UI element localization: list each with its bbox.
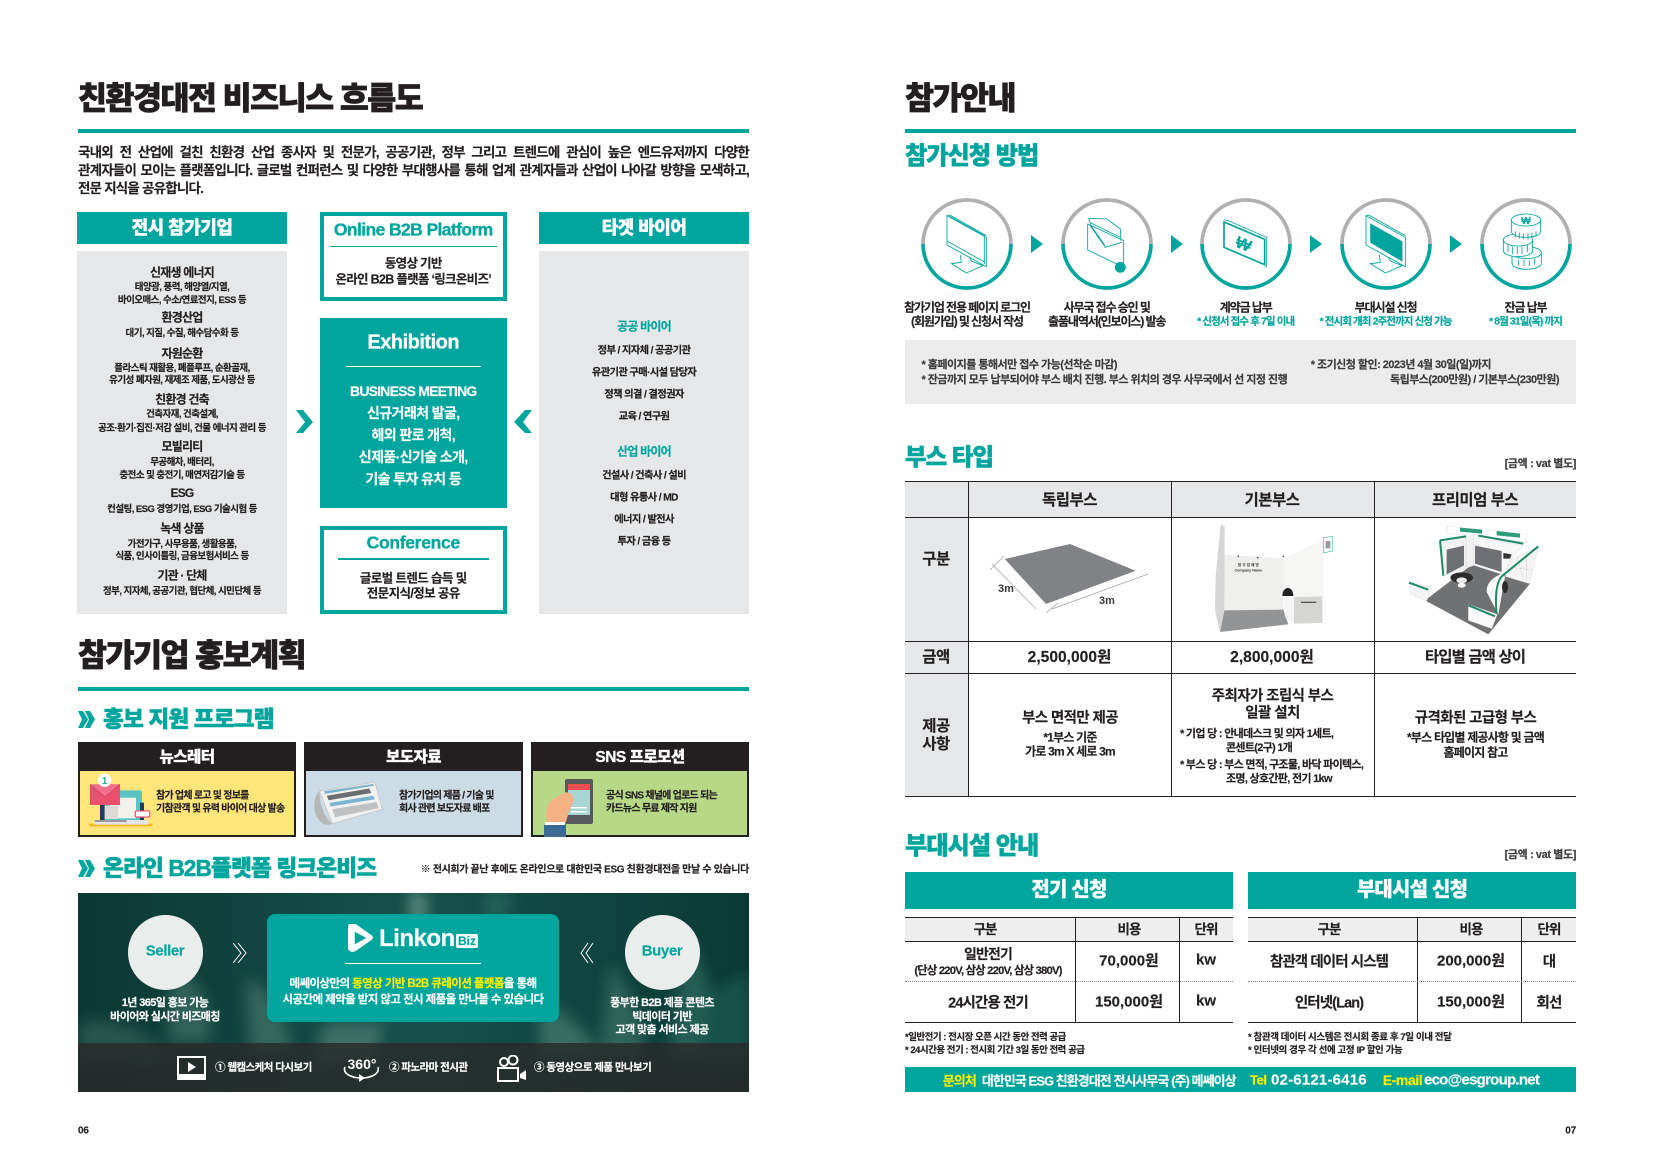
arrow: step 4 to 5 <box>1450 235 1462 253</box>
col 1 details <box>969 706 1171 761</box>
image: basic shell booth <box>1175 517 1371 641</box>
panel: conference: 전문지식/정보 공유 <box>367 586 460 600</box>
seller text <box>110 996 220 1023</box>
step 1 label: 참가기업 전용 페이지 로그인 <box>904 300 1030 314</box>
panel: application notes: 독립부스(200만원) / 기본부스(230만원) <box>1390 374 1559 386</box>
header: target buyers <box>539 212 749 244</box>
panel: exhibitors list: 기관 · 단체 <box>157 568 207 582</box>
panel: exhibition <box>320 318 506 508</box>
icon: video camera <box>497 1055 526 1082</box>
panel: exhibitors list: 바이오매스, 수소/연료전지, ESS 등 <box>118 295 246 306</box>
panel: Linkon Biz banner <box>78 893 749 1092</box>
panel: exhibitors list: 건축자재, 건축설계, <box>146 409 218 420</box>
panel: exhibitors list: 무공해차, 배터리, <box>150 457 214 468</box>
panel: electric application: 일반전기 <box>964 946 1012 962</box>
arrow: double chevron left <box>580 943 594 963</box>
table: booth types: 제공 <box>922 718 950 734</box>
step 5 label <box>1489 300 1562 328</box>
col 1 details: 부스 면적만 제공 <box>1022 710 1118 726</box>
panel: exhibition: BUSINESS MEETING <box>350 383 476 399</box>
panel: conference: Conference <box>367 532 460 552</box>
arrow: left chevron <box>514 410 532 433</box>
image: premium booth <box>1374 517 1576 641</box>
image: basic shell booth: Company Name <box>1235 568 1262 572</box>
panel: facility application: 200,000원 <box>1437 952 1505 970</box>
panel: exhibition: Exhibition <box>367 332 459 354</box>
panel: target buyers list: 산업 바이어 <box>617 444 671 458</box>
panel: Linkon Biz box <box>267 914 559 1022</box>
panel: facility application: 150,000원 <box>1437 994 1505 1010</box>
seller circle: Seller <box>146 942 184 960</box>
panel: online B2B platform: 동영상 기반 <box>385 256 442 270</box>
step 1: login <box>904 198 1030 328</box>
panel: target buyers list: 건설사 / 건축사 / 설비 <box>602 470 686 482</box>
seller text: 1년 365일 홍보 가능 <box>122 997 208 1009</box>
newsletter text: 기참관객 및 유력 바이어 대상 발송 <box>156 804 284 814</box>
intro paragraph: 국내외 전 산업에 걸친 친환경 산업 종사자 및 전문가, 공공기관, 정부 그리고 트렌드에 관심이 높은 엔드유저까지 다양한 <box>78 144 749 160</box>
panel: electric application: 150,000원 <box>1095 994 1163 1010</box>
table: booth types: 타입별 금액 상이 <box>1425 648 1525 666</box>
panel: exhibitors list: 유기성 폐자원, 재제조 제품, 도시광산 등 <box>109 375 255 386</box>
panel: exhibitors list: 모빌리티 <box>162 440 202 454</box>
buyer circle: Buyer <box>642 942 682 960</box>
header: exhibitors: 전시 참가기업 <box>132 218 232 238</box>
header: target buyers: 타겟 바이어 <box>602 218 686 238</box>
panel: exhibitors list: 충전소 및 충전기, 매연저감기술 등 <box>119 470 245 481</box>
label: product videos: ③ 동영상으로 제품 만나보기 <box>534 1062 651 1074</box>
panel: exhibition: 신제품·신기술 소개, <box>359 449 468 465</box>
panel: target buyers list <box>539 251 749 614</box>
panel: exhibitors list: 대기, 지질, 수질, 해수담수화 등 <box>126 328 238 339</box>
panel: exhibitors list: 공조·환기·집진·저감 설비, 건물 에너지 관리 등 <box>98 423 266 434</box>
panel: application notes: * 홈페이지를 통해서만 접수 가능(선착순 마감) <box>922 359 1117 371</box>
step 4 label <box>1320 300 1452 328</box>
intro paragraph <box>78 144 750 196</box>
icon: 360 panorama: 360° <box>348 1056 376 1072</box>
icon: 360 panorama <box>344 1056 380 1082</box>
table: booth types: 2,500,000원 <box>1028 648 1111 666</box>
icon: video screen <box>177 1056 206 1080</box>
press release text <box>399 790 494 814</box>
panel: exhibitors list: 자원순환 <box>162 346 202 360</box>
electric notes <box>905 1029 1233 1057</box>
panel: exhibitors list: 컨설팅, ESG 경영기업, ESG 기술시험 등 <box>107 504 257 515</box>
contact bar <box>905 1067 1576 1092</box>
heading: booth types: 부스 타입 <box>905 444 993 470</box>
panel: electric application: 전기 신청 <box>1031 879 1107 901</box>
panel: application notes: * 잔금까지 모두 납부되어야 부스 배치 진행. 부스 위치의 경우 사무국에서 선 지정 진행 <box>922 374 1287 386</box>
step 5: balance payment <box>1480 198 1572 328</box>
arrow: step 1 to 2 <box>1031 235 1043 253</box>
Linkon Biz description: 시공간에 제약을 받지 않고 전시 제품을 만나볼 수 있습니다 <box>283 994 543 1006</box>
table: booth types: 금액 <box>922 648 950 666</box>
panel: facility application <box>1248 872 1576 1024</box>
table: booth types: 2,800,000원 <box>1230 648 1314 666</box>
newsletter text: 참가 업체 로고 및 정보를 <box>156 790 249 802</box>
buyer text: 풍부한 B2B 제품 콘텐츠 <box>610 997 714 1009</box>
second title: 참가기업 홍보계획 <box>78 637 305 673</box>
arrow: step 3 to 4 <box>1310 235 1322 253</box>
step 2: approval <box>1048 198 1166 328</box>
buyer text: 빅데이터 기반 <box>632 1011 692 1023</box>
col 3 details: *부스 타입별 제공사항 및 금액 <box>1407 730 1544 744</box>
panel: target buyers list: 대형 유통사 / MD <box>610 492 678 504</box>
SNS text: 카드뉴스 무료 제작 지원 <box>606 804 697 814</box>
heading: online B2B platform Linkon Biz: 온라인 B2B플랫폼 링크온비즈 <box>103 855 376 881</box>
price note: [금액 : vat 별도] <box>1505 458 1576 470</box>
panel: application notes <box>905 340 1576 404</box>
left page title: 친환경대전 비즈니스 흐름도 <box>78 80 422 116</box>
press release text: 회사 관련 보도자료 배포 <box>399 804 490 814</box>
electric notes: * 24시간용 전기 : 전시회 기간 3일 동안 전력 공급 <box>905 1045 1085 1056</box>
panel: facility application: 비용 <box>1459 922 1483 936</box>
icon: envelope <box>1061 198 1153 290</box>
panel: exhibitors list: 신재생 에너지 <box>150 266 214 280</box>
step 4 label: 부대시설 신청 <box>1355 300 1417 314</box>
panel: exhibition: 해외 판로 개척, <box>371 427 455 443</box>
panel: exhibitors list: 정부, 지자체, 공공기관, 협단체, 시민단체 등 <box>103 586 261 597</box>
step 3: deposit <box>1197 198 1294 328</box>
panel: electric application: 구분 <box>973 922 997 936</box>
card: SNS promotion <box>531 742 749 837</box>
panel: target buyers list: 투자 / 금융 등 <box>618 536 670 548</box>
step 4: extra facilities <box>1320 198 1452 328</box>
price note 2: [금액 : vat 별도] <box>1505 849 1576 861</box>
table: booth types: 독립부스 <box>1042 492 1097 509</box>
table: booth types: 구분 <box>922 551 950 568</box>
panel: exhibitors list: 친환경 건축 <box>155 392 209 406</box>
col 1 details: 가로 3m X 세로 3m <box>1025 744 1115 758</box>
panel: exhibitors list: 녹색 상품 <box>160 522 204 536</box>
panel: exhibition: 신규거래처 발굴, <box>367 405 460 421</box>
panel: exhibitors list: 가전가구, 사무용품, 생활용품, <box>128 539 236 550</box>
panel: facility application: 부대시설 신청 <box>1357 879 1467 901</box>
label: panorama hall: ② 파노라마 전시관 <box>389 1062 467 1074</box>
col 3 details <box>1375 706 1576 761</box>
panel: exhibitors list: 태양광, 풍력, 해양열/지열, <box>135 282 229 293</box>
contact bar: 대한민국 ESG 친환경대전 전시사무국 (주) 메쎄이상 <box>982 1073 1236 1088</box>
panel: facility application: 참관객 데이터 시스템 <box>1270 954 1388 970</box>
contact bar: E-mail <box>1383 1072 1422 1088</box>
panel: facility application: 회선 <box>1537 995 1561 1011</box>
online note: ※ 전시회가 끝난 후에도 온라인으로 대한민국 ESG 친환경대전을 만날 수 있습니다 <box>421 864 749 876</box>
step 3 label: 계약금 납부 <box>1220 300 1272 314</box>
icon: newspaper <box>314 782 383 825</box>
page number 07: 07 <box>1565 1126 1576 1136</box>
logo: Linkon Biz: Biz <box>458 934 476 948</box>
logo: Linkon Biz: Linkon <box>379 925 455 952</box>
col 3 details: 규격화된 고급형 부스 <box>1415 710 1536 726</box>
SNS text <box>606 790 718 814</box>
right page title: 참가안내 <box>905 80 1015 116</box>
panel: facility application: 대 <box>1543 954 1555 970</box>
col 2 details: 일괄 설치 <box>1245 706 1300 722</box>
contact bar: 02-6121-6416 <box>1271 1071 1367 1088</box>
contact bar: eco@esgroup.net <box>1424 1071 1539 1088</box>
panel: exhibitors list: 환경산업 <box>162 310 202 324</box>
newsletter text <box>156 790 285 814</box>
table: booth types <box>905 481 1576 797</box>
facility notes: * 인터넷의 경우 각 선에 고정 IP 할인 가능 <box>1248 1045 1402 1056</box>
icon: coins <box>1480 198 1572 290</box>
col 2 details: * 기업 당 : 안내데스크 및 의자 1세트, <box>1180 728 1333 740</box>
col 2 details: 조명, 상호간판, 전기 1kw <box>1226 773 1332 785</box>
Linkon Biz description: 메쎄이상만의 동영상 기반 B2B 큐레이션 플랫폼을 통해 <box>290 978 536 990</box>
step 3 label: * 신청서 접수 후 7일 이내 <box>1197 316 1294 328</box>
panel: online B2B platform: Online B2B Platform <box>334 220 493 240</box>
facility notes: * 참관객 데이터 시스템은 전시회 종료 후 7일 이내 전달 <box>1248 1032 1451 1043</box>
panel: exhibition: 기술 투자 유치 등 <box>365 471 461 487</box>
intro paragraph: 전문 지식을 공유합니다. <box>78 181 203 196</box>
panel: target buyers list: 교육 / 연구원 <box>619 412 669 422</box>
panel: electric application: 24시간용 전기 <box>948 995 1028 1011</box>
buyer text <box>610 996 714 1036</box>
heading: how to apply: 참가신청 방법 <box>905 143 1038 170</box>
step 2 label <box>1048 300 1166 328</box>
buyer text: 고객 맞춤 서비스 제공 <box>615 1024 709 1036</box>
contact bar: Tel <box>1250 1072 1267 1087</box>
page number 06: 06 <box>78 1126 89 1136</box>
step 5 label: 잔금 납부 <box>1504 300 1546 314</box>
step 1 label: (회원가입) 및 신청서 작성 <box>911 314 1023 328</box>
panel: exhibitors list <box>77 251 287 614</box>
col 3 details: 홈페이지 참고 <box>1444 746 1507 760</box>
arrow: right chevron <box>296 410 313 433</box>
col 2 details: 주최자가 조립식 부스 <box>1212 688 1333 704</box>
SNS text: 공식 SNS 채널에 업로드 되는 <box>606 790 717 802</box>
panel: exhibitors list: 식품, 인사이틀링, 금융보험서비스 등 <box>115 551 249 562</box>
step 2 label: 출품내역서(인보이스) 발송 <box>1048 314 1165 328</box>
table: booth types: 기본부스 <box>1244 492 1300 509</box>
panel: facility application: 구분 <box>1317 922 1341 936</box>
icon: mail and laptop: 1 <box>102 776 108 787</box>
label: webinar replay: ① 웹캠스케처 다시보기 <box>215 1062 312 1074</box>
card: press release: 보도자료 <box>386 749 441 766</box>
panel: application notes: * 조기신청 할인: 2023년 4월 30일(일)까지 <box>1311 359 1491 371</box>
icon: won bill <box>1200 198 1292 290</box>
icon: hand with phone <box>544 779 593 837</box>
icon: coins: ₩ <box>1521 216 1531 227</box>
step 2 label: 사무국 접수 승인 및 <box>1064 300 1150 314</box>
step 5 label: * 8월 31일(목) 까지 <box>1489 316 1562 328</box>
panel: target buyers list: 공공 바이어 <box>617 320 671 334</box>
panel: electric application: 비용 <box>1117 922 1141 936</box>
buyer circle <box>624 915 700 990</box>
press release text: 참가기업의 제품 / 기술 및 <box>399 790 494 802</box>
image: independent booth floor <box>980 531 1160 631</box>
icon: mail and laptop <box>88 774 154 826</box>
card: SNS promotion: SNS 프로모션 <box>595 749 685 766</box>
col 2 details: * 부스 당 : 부스 면적, 구조물, 바닥 파이텍스, <box>1180 759 1363 771</box>
table: booth types: 프리미엄 부스 <box>1432 492 1518 509</box>
panel: facility application: 단위 <box>1537 922 1561 936</box>
step 4 label: * 전시회 개최 2주전까지 신청 가능 <box>1320 316 1452 328</box>
seller circle <box>128 915 202 990</box>
heading: extra facilities: 부대시설 안내 <box>905 833 1038 860</box>
table: booth types: 사항 <box>922 736 950 752</box>
panel: facility application: 인터넷(Lan) <box>1295 995 1363 1011</box>
panel: online B2B platform: 온라인 B2B 플랫폼 ‘링크온비즈’ <box>335 272 491 286</box>
card: newsletter <box>78 742 296 837</box>
heading: promotion support program: 홍보 지원 프로그램 <box>103 706 274 732</box>
header: exhibitors <box>77 212 287 244</box>
panel: online B2B platform <box>320 212 506 301</box>
panel: electric application: (단상 220V, 삼상 220V, 삼상 380V) <box>914 965 1062 977</box>
panel: target buyers list: 유관기관 구매·시설 담당자 <box>592 368 696 378</box>
panel: electric application: 70,000원 <box>1099 952 1159 970</box>
panel: electric application: kw <box>1196 952 1216 968</box>
panel: target buyers list: 에너지 / 발전사 <box>614 514 674 526</box>
logo: Linkon Biz <box>348 924 478 952</box>
step 3 label <box>1197 300 1294 328</box>
image: basic shell booth: 참 가 업 체 명 <box>1238 562 1259 568</box>
image: independent booth floor: 3m <box>998 583 1014 595</box>
icon: won bill: ₩ <box>1232 232 1254 256</box>
seller text: 바이어와 실시간 비즈매칭 <box>110 1011 220 1023</box>
panel: target buyers list: 정책 의결 / 결정권자 <box>604 390 684 400</box>
panel: electric application <box>905 872 1233 1024</box>
step 1 label <box>904 300 1030 328</box>
facility notes <box>1248 1029 1576 1057</box>
card: press release <box>304 742 523 837</box>
electric notes: *일반전기 : 전시장 오픈 시간 동안 전력 공급 <box>905 1032 1066 1043</box>
panel: exhibitors list: 플라스틱 재활용, 폐플루프, 순환골재, <box>114 363 250 374</box>
intro paragraph: 관계자들이 모이는 플랫폼입니다. 글로벌 컨퍼런스 및 다양한 부대행사를 통해 업계 관계자들과 산업이 나아갈 방향을 모색하고, <box>78 163 749 178</box>
col 2 details: 콘센트(2구) 1개 <box>1226 742 1292 754</box>
card: newsletter: 뉴스레터 <box>159 749 215 766</box>
panel: conference <box>320 526 506 614</box>
panel: target buyers list: 정부 / 지자체 / 공공기관 <box>598 346 690 356</box>
icon: monitor <box>921 198 1013 290</box>
panel: conference: 글로벌 트렌드 습득 및 <box>360 572 467 586</box>
col 1 details: *1부스 기준 <box>1043 730 1097 744</box>
contact bar: 문의처 <box>943 1073 976 1088</box>
icon: monitor filled <box>1340 198 1432 290</box>
panel: exhibitors list: ESG <box>171 486 193 500</box>
col 2 details <box>1172 686 1373 786</box>
image: independent booth floor: 3m <box>1099 595 1115 607</box>
panel: electric application: 단위 <box>1194 922 1218 936</box>
arrow: step 2 to 3 <box>1171 235 1183 253</box>
Linkon Biz description <box>282 977 544 1006</box>
arrow: double chevron right <box>233 943 247 963</box>
panel: electric application: kw <box>1196 992 1216 1010</box>
